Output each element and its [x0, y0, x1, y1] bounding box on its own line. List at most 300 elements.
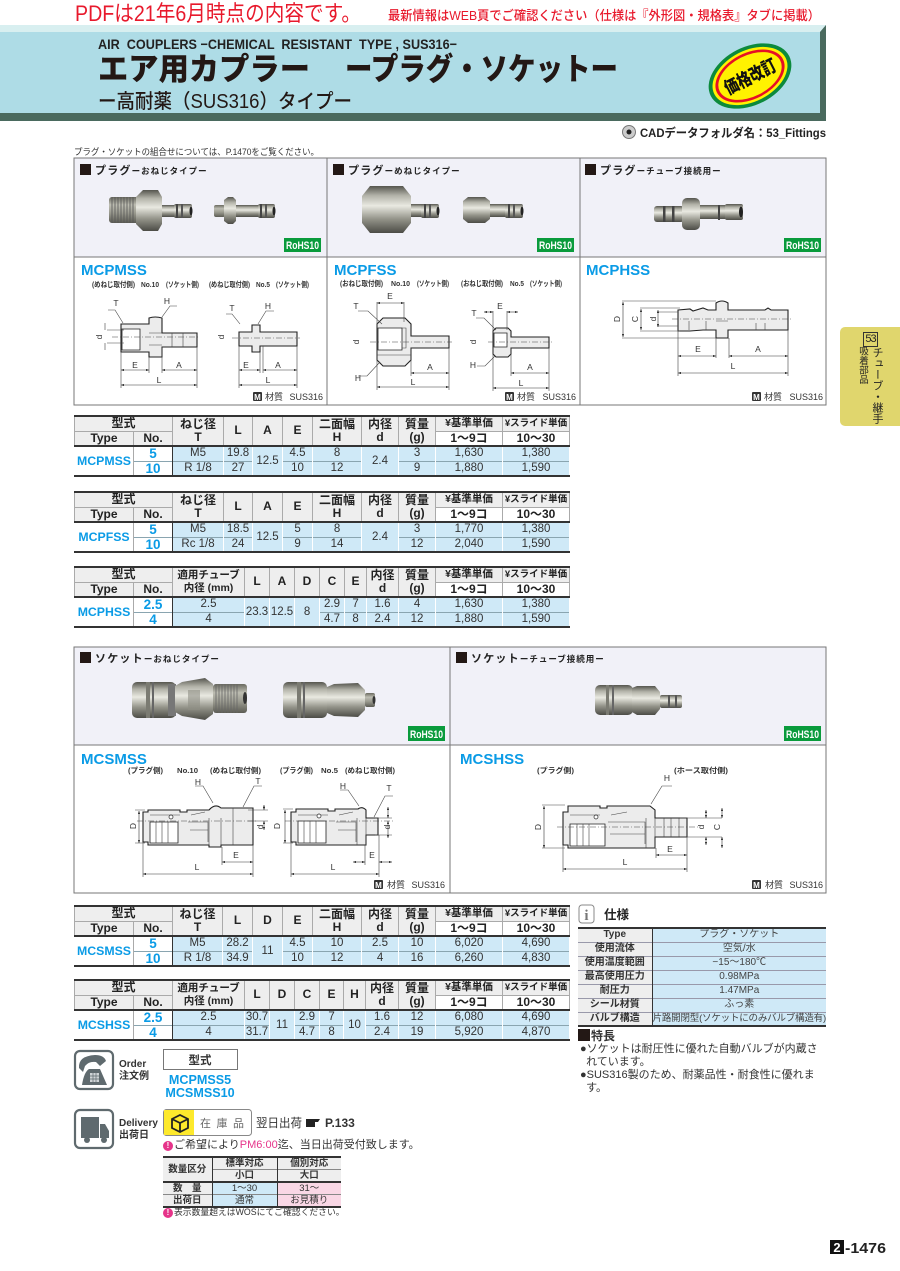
- spec table: 1.47MPa: [719, 985, 759, 996]
- table: MCPFSS: T: [194, 506, 202, 520]
- table: MCPFSS: 14: [331, 538, 343, 550]
- red notice: [75, 1, 820, 25]
- labels: MCPMSS: (ソケット側): [276, 279, 309, 289]
- delivery table: 大口: [300, 1170, 319, 1181]
- heading: tube plug: プラグーチューブ接続用ー: [600, 163, 722, 177]
- table: MCSHSS: L: [253, 987, 261, 1001]
- table: MCPHSS: D: [303, 574, 311, 588]
- table: MCPMSS: R 1/8: [184, 462, 212, 474]
- model name: MCSMSS: [81, 751, 147, 768]
- quantity note: !: [167, 1208, 169, 1217]
- material label: 材質: [517, 391, 535, 402]
- table: MCPFSS: ¥基準単価: [445, 493, 493, 505]
- table: MCSMSS: (g): [409, 920, 425, 934]
- table: MCPMSS: 9: [414, 462, 420, 474]
- table: MCSHSS: 4.7: [299, 1026, 315, 1038]
- table: MCPFSS: 内径: [368, 492, 392, 506]
- features list: ●SUS316製のため、耐薬品性・耐食性に優れま: [580, 1069, 815, 1081]
- table: MCSHSS: 内径 (mm): [184, 995, 233, 1007]
- table: MCPHSS: 2.5: [201, 598, 217, 610]
- spec heading: [578, 904, 630, 924]
- drawing: MCSMSS No.10: T: [255, 776, 261, 786]
- delivery table: 個別対応: [290, 1158, 328, 1169]
- table: MCPFSS: A: [263, 499, 272, 513]
- table: MCPFSS: E: [294, 499, 302, 513]
- spec table: 最高使用圧力: [585, 971, 645, 982]
- table: MCSMSS: 型式: [112, 906, 136, 920]
- table: MCSHSS: [74, 979, 570, 1041]
- table: MCPMSS: ¥スライド単価: [505, 418, 567, 429]
- table: MCSMSS: 10: [291, 952, 304, 964]
- labels: MCPFSS: No.5: [510, 279, 524, 288]
- table: MCSHSS: 4: [205, 1026, 212, 1038]
- drawing: MCPMSS No.5: d: [216, 334, 226, 339]
- order models: MCPMSS5: [169, 1073, 231, 1087]
- table: MCPMSS: A: [263, 423, 272, 437]
- table: MCPMSS: T: [194, 430, 202, 444]
- icon: phone: [75, 1051, 113, 1089]
- table: MCPMSS: E: [294, 423, 302, 437]
- table: MCSHSS: 31.7: [246, 1026, 268, 1038]
- tab number: 53: [865, 333, 876, 345]
- spec table: −15〜180℃: [712, 957, 766, 968]
- drawing: MCSMSS No.5: T: [386, 783, 392, 793]
- features: [578, 1029, 818, 1094]
- model name: MCPHSS: [586, 262, 650, 279]
- spec table: 使用温度範囲: [585, 957, 645, 968]
- table: MCPHSS: C: [328, 574, 336, 588]
- table: MCPHSS: (g): [409, 581, 425, 595]
- table: MCPHSS: 内径: [370, 568, 395, 582]
- drawing: MCSMSS No.10: H: [195, 777, 201, 787]
- drawing: MCSMSS No.5: [272, 781, 395, 877]
- labels: MCPFSS: (おねじ取付側): [340, 278, 383, 288]
- table: MCSHSS: ¥スライド単価: [505, 982, 567, 993]
- table: MCSMSS: MCSMSS: [77, 944, 131, 958]
- delivery table: 1〜30: [232, 1183, 257, 1194]
- labels: MCPFSS: (ソケット側): [530, 278, 562, 288]
- drawing: MCPFSS No.5: A: [527, 362, 533, 372]
- spec table: Type: [603, 929, 626, 940]
- table: MCSHSS: H: [350, 987, 359, 1001]
- table: MCSMSS: 10: [411, 937, 423, 949]
- table: MCSMSS: 二面幅: [319, 906, 355, 920]
- table: MCSMSS: 16: [411, 952, 423, 964]
- spec table: 耐圧力: [600, 985, 630, 996]
- table: MCPMSS: 12: [331, 462, 343, 474]
- table: MCSMSS: 12: [331, 952, 343, 964]
- drawing: MCSHSS: H: [664, 773, 670, 783]
- rohs badge: RoHS10: [539, 240, 572, 252]
- heading: female thread plug: プラグーめねじタイプー: [348, 163, 461, 177]
- table: MCSMSS: 4.5: [290, 937, 306, 949]
- drawing: MCPFSS No.5: H: [470, 360, 476, 370]
- table: MCPHSS: 質量: [405, 568, 429, 582]
- material label: M: [254, 393, 261, 402]
- delivery table: 標準対応: [225, 1158, 264, 1169]
- drawing: MCPMSS No.10: [94, 296, 200, 388]
- drawing: MCPFSS No.10: A: [427, 362, 433, 372]
- drawing: MCPMSS No.5: H: [265, 301, 271, 311]
- table: MCPMSS: ねじ径: [180, 416, 216, 430]
- drawing: MCPFSS No.10: L: [411, 377, 416, 387]
- features list: [580, 1042, 818, 1094]
- drawing: MCPFSS No.10: T: [353, 301, 359, 311]
- drawing: MCPMSS No.5: T: [229, 303, 235, 313]
- table: MCPMSS: 二面幅: [319, 416, 355, 430]
- japanese subtitle: ー高耐薬（SUS316）タイプー: [98, 90, 352, 113]
- table: MCSHSS: 質量: [405, 980, 429, 994]
- table: MCPHSS: 23.3: [246, 606, 268, 618]
- material label: M: [375, 881, 382, 890]
- drawing: MCPHSS: [612, 301, 793, 376]
- table: MCPHSS: 4: [205, 613, 212, 625]
- table: MCPHSS: [74, 566, 570, 628]
- drawing: MCSMSS No.5: D: [272, 823, 282, 829]
- same-day shipping note: !: [167, 1141, 169, 1150]
- drawing: MCSMSS No.10: d: [255, 824, 265, 829]
- labels: MCSMSS: No.10: [177, 766, 198, 775]
- drawing: MCPHSS: A: [755, 344, 761, 354]
- drawing: MCSHSS: [533, 773, 722, 872]
- table: MCPMSS: (g): [409, 430, 425, 444]
- page number: [830, 1240, 886, 1256]
- heading: male thread plug: プラグーおねじタイプー: [95, 163, 208, 177]
- table: MCPHSS: 4: [149, 612, 157, 627]
- table: MCPHSS: 2.9: [324, 598, 340, 610]
- labels: MCSMSS: (プラグ側): [128, 765, 163, 775]
- quantity note: 表示数量超えはWOSにてご確認ください。: [174, 1207, 345, 1217]
- delivery text: 出荷日: [119, 1128, 149, 1141]
- drawing: MCSMSS No.5: L: [331, 862, 336, 872]
- table: MCPFSS: 1,380: [522, 523, 550, 535]
- table: MCSMSS: ¥スライド単価: [505, 908, 567, 919]
- stock box: [164, 1110, 252, 1136]
- table: MCPHSS: MCPHSS: [78, 604, 130, 618]
- table: MCPMSS: 12.5: [256, 454, 279, 466]
- red notice: 最新情報はWEB頁でご確認ください（仕様は『外形図・規格表』タブに掲載）: [388, 8, 820, 23]
- table: MCPFSS: [74, 491, 570, 553]
- table: MCSMSS: 内径: [368, 906, 392, 920]
- table: MCSHSS: 2.9: [299, 1011, 315, 1023]
- delivery table: 出荷日: [173, 1195, 202, 1206]
- table: MCPHSS: ¥スライド単価: [505, 569, 567, 580]
- table: MCPFSS: 型式: [112, 492, 136, 506]
- drawing: MCSMSS No.5: H: [340, 781, 346, 791]
- panel: plugs: [74, 158, 826, 406]
- table: MCPMSS: MCPMSS: [77, 454, 131, 468]
- table: MCPMSS: 1,880: [455, 462, 483, 474]
- table: MCSHSS: 12: [411, 1011, 423, 1023]
- table: MCPHSS: 8: [352, 613, 359, 625]
- table: MCPHSS: 1,880: [455, 613, 483, 625]
- labels: MCPFSS: (おねじ取付側): [461, 278, 503, 288]
- table: MCPFSS: d: [376, 506, 384, 520]
- table: MCPFSS: 8: [334, 523, 340, 535]
- delivery text: Delivery: [119, 1118, 158, 1129]
- table: MCPHSS: 2.4: [375, 613, 391, 625]
- rohs badge: [408, 726, 445, 741]
- table: MCSHSS: 2.5: [144, 1010, 162, 1025]
- material label: [374, 879, 445, 890]
- table: MCPMSS: 10: [291, 462, 304, 474]
- table: MCPHSS: 適用チューブ: [177, 568, 240, 580]
- spec table: プラグ・ソケット: [699, 929, 779, 940]
- model name: MCSHSS: [460, 751, 524, 768]
- table: MCPFSS: 2,040: [455, 538, 483, 550]
- table: MCSHSS: 8: [328, 1026, 335, 1038]
- labels: MCSHSS: (プラグ側): [537, 765, 575, 775]
- table: MCPHSS: 7: [352, 598, 359, 610]
- table: MCPFSS: 10: [145, 537, 161, 552]
- rohs badge: RoHS10: [786, 240, 819, 252]
- table: MCSMSS: R 1/8: [184, 952, 211, 964]
- spec table: シール材質: [590, 999, 640, 1010]
- table: MCPMSS: H: [333, 430, 341, 444]
- labels: MCPMSS: No.5: [256, 280, 270, 289]
- icon: truck: [75, 1110, 113, 1148]
- labels: MCSMSS: [128, 765, 395, 775]
- table: MCPMSS: d: [376, 430, 384, 444]
- table: MCSHSS: 2.5: [201, 1011, 217, 1023]
- drawing: MCPFSS No.5: d: [468, 339, 478, 344]
- tab sub category: 吸着部品: [857, 346, 868, 384]
- table: MCSHSS: 4: [149, 1025, 157, 1040]
- table: MCSHSS: 1.6: [374, 1011, 390, 1023]
- table: MCPFSS: 3: [414, 523, 420, 535]
- spec table: [578, 927, 826, 1027]
- tab number: [863, 332, 878, 347]
- table: MCPFSS: 二面幅: [319, 492, 355, 506]
- delivery table: お見積り: [290, 1195, 328, 1206]
- material label: SUS316: [542, 392, 576, 402]
- table: MCPFSS: 1,590: [522, 538, 550, 550]
- rohs badge: [537, 238, 574, 252]
- table: MCPMSS: L: [234, 423, 242, 437]
- table: MCSMSS: M5: [190, 937, 206, 949]
- heading: male thread socket: ソケットーおねじタイプー: [95, 652, 220, 665]
- table: MCSMSS: 34.9: [226, 952, 249, 964]
- table: MCPHSS: 1,590: [522, 613, 550, 625]
- spec table: 空気/水: [723, 943, 756, 954]
- drawing: MCPHSS: D: [612, 316, 622, 322]
- main title: エア用カプラー: [98, 52, 310, 87]
- table: MCSHSS: 11: [276, 1018, 288, 1030]
- column label: [164, 1050, 238, 1070]
- table: MCSMSS: ¥基準単価: [445, 907, 493, 919]
- table: MCPMSS: 5: [149, 446, 157, 461]
- table: MCPFSS: MCPFSS: [78, 530, 130, 544]
- table: MCSHSS: 6,080: [455, 1011, 483, 1023]
- drawing: MCPFSS No.10: d: [351, 339, 361, 344]
- table: MCSMSS: D: [263, 913, 272, 927]
- model name: MCPFSS: [334, 262, 397, 279]
- photo: MCSMSS sockets: [132, 678, 376, 720]
- features heading: 特長: [591, 1029, 615, 1043]
- table: MCPMSS: 4.5: [290, 447, 306, 459]
- table: MCSMSS: 6,260: [455, 952, 483, 964]
- spec table: 片路開閉型(ソケットにのみバルブ構造有): [653, 1013, 826, 1024]
- rohs badge: RoHS10: [786, 729, 819, 741]
- next day shipping: P.133: [325, 1116, 355, 1130]
- table: MCSHSS: 10: [348, 1018, 361, 1030]
- table: MCSMSS: 28.2: [226, 937, 249, 949]
- features list: す。: [586, 1082, 607, 1094]
- material label: SUS316: [411, 880, 445, 890]
- table: MCPHSS: 内径 (mm): [184, 582, 233, 594]
- labels: MCPFSS: (ソケット側): [417, 278, 449, 288]
- photo: MCSHSS socket: [595, 685, 682, 715]
- labels: MCPMSS: (めねじ取付側): [92, 279, 135, 289]
- spec heading: 仕様: [604, 907, 630, 922]
- table: MCPMSS: M5: [190, 447, 206, 459]
- drawing: MCSHSS: D: [533, 824, 543, 830]
- table: MCSMSS: T: [194, 920, 201, 934]
- table: MCPFSS: ¥スライド単価: [505, 494, 567, 505]
- labels: MCSMSS: (プラグ側): [280, 765, 313, 775]
- table: MCPHSS: 12.5: [271, 606, 293, 618]
- table: MCPHSS: 12: [411, 613, 423, 625]
- features list: れています。: [586, 1056, 651, 1068]
- spec heading: i: [584, 908, 589, 924]
- table: MCSHSS: C: [303, 987, 311, 1001]
- material label: [253, 391, 323, 402]
- drawing: MCSMSS No.10: L: [195, 862, 200, 872]
- badge: price revised: [698, 30, 802, 122]
- material label: SUS316: [289, 392, 323, 402]
- table: MCPHSS: A: [278, 574, 286, 588]
- table: MCPHSS: 4: [414, 598, 420, 610]
- table: MCPMSS: 8: [334, 447, 340, 459]
- drawing: MCPMSS No.10: d: [94, 334, 104, 339]
- labels: MCPMSS: (ソケット側): [166, 279, 199, 289]
- drawing: MCSHSS: C: [712, 824, 722, 830]
- table: MCPFSS: 2.4: [372, 530, 388, 542]
- table: MCSHSS: 適用チューブ: [177, 982, 240, 994]
- labels: MCSMSS: (めねじ取付側): [210, 765, 262, 775]
- drawing: MCPMSS No.10: H: [164, 296, 170, 306]
- material label: [505, 391, 576, 402]
- spec table: ふっ素: [724, 999, 754, 1010]
- table: MCPMSS: 3: [414, 447, 420, 459]
- labels: MCPMSS: (めねじ取付側): [209, 279, 250, 289]
- labels: MCPMSS: [92, 279, 309, 289]
- material label: SUS316: [789, 880, 823, 890]
- drawing: MCPMSS No.10: A: [176, 360, 182, 370]
- table: MCSMSS: 10: [331, 937, 343, 949]
- material label: 材質: [765, 879, 783, 890]
- drawing: MCSMSS No.10: D: [128, 823, 138, 829]
- table: MCPHSS: L: [253, 574, 261, 588]
- table: MCSHSS: (g): [409, 994, 425, 1008]
- table: MCPHSS: ¥基準単価: [445, 568, 493, 580]
- photo: MCPMSS plugs: [109, 190, 276, 231]
- table: MCSHSS: d: [378, 994, 386, 1008]
- table: MCPHSS: 1,380: [522, 598, 550, 610]
- drawing: MCPHSS: C: [630, 316, 640, 322]
- drawing: MCSMSS No.5: E: [369, 850, 375, 860]
- rohs badge: RoHS10: [410, 729, 443, 741]
- table: MCPMSS: 1,590: [522, 462, 550, 474]
- main title: [98, 52, 618, 87]
- title banner: [0, 25, 826, 121]
- table: MCPFSS: 5: [294, 523, 301, 535]
- heading: tube socket: ソケットーチューブ接続用ー: [471, 652, 605, 665]
- table: MCSMSS: 4: [377, 952, 383, 964]
- table: MCPHSS: E: [352, 574, 360, 588]
- table: MCPMSS: [74, 415, 570, 477]
- table: MCSHSS: 2.4: [374, 1026, 390, 1038]
- table: MCPMSS: 27: [232, 462, 244, 474]
- table: MCPHSS: d: [379, 581, 386, 595]
- delivery: [74, 1108, 355, 1150]
- drawing: MCPFSS No.10: [351, 291, 452, 390]
- table: MCSMSS: 5: [149, 936, 157, 951]
- material label: M: [506, 393, 513, 402]
- table: MCPFSS: 12.5: [256, 530, 279, 542]
- labels: MCPFSS: No.10: [391, 279, 410, 288]
- table: MCPFSS: ねじ径: [180, 492, 216, 506]
- order text: Order: [119, 1059, 146, 1070]
- table: MCSMSS: ねじ径: [180, 906, 216, 920]
- rohs badge: [284, 238, 321, 252]
- material label: [752, 879, 823, 890]
- drawing: MCPMSS No.5: A: [275, 360, 281, 370]
- labels: MCPFSS: [340, 278, 562, 288]
- table: MCSHSS: MCSHSS: [78, 1018, 130, 1032]
- table: MCPMSS: 2.4: [372, 454, 388, 466]
- table: MCSHSS: 5,920: [455, 1026, 483, 1038]
- table: MCSMSS: 10: [145, 951, 161, 966]
- material label: 材質: [764, 391, 782, 402]
- drawing: MCPHSS: d: [648, 316, 658, 321]
- material label: 材質: [387, 879, 405, 890]
- order models: [165, 1073, 235, 1100]
- table: MCPMSS: ¥基準単価: [445, 417, 493, 429]
- table: MCPMSS: 内径: [368, 416, 392, 430]
- delivery text: [119, 1118, 158, 1141]
- table: MCSHSS: D: [278, 987, 286, 1001]
- table: MCPMSS: 19.8: [227, 447, 249, 459]
- features list: ●ソケットは耐圧性に優れた自動バルブが内蔵さ: [580, 1043, 818, 1055]
- table: MCSMSS: d: [376, 920, 384, 934]
- table: MCSHSS: 30.7: [246, 1011, 268, 1023]
- drawing: MCSHSS: d: [696, 824, 706, 829]
- next day shipping: 翌日出荷: [256, 1116, 302, 1130]
- table: MCPMSS: 1,630: [455, 447, 483, 459]
- table: MCPFSS: H: [333, 506, 341, 520]
- material label: SUS316: [789, 392, 823, 402]
- drawing: MCPFSS No.10: E: [387, 291, 393, 301]
- delivery table: [163, 1156, 341, 1208]
- labels: MCSHSS: (ホース取付側): [674, 765, 729, 775]
- badge: price revised: 価格改訂: [721, 54, 780, 99]
- material label: M: [753, 881, 760, 890]
- drawing: MCPMSS No.10: L: [157, 375, 162, 385]
- drawing: MCPFSS No.5: E: [497, 301, 503, 311]
- table: MCSHSS: ¥基準単価: [445, 981, 493, 993]
- labels: MCPMSS: No.10: [141, 280, 159, 289]
- table: MCSMSS: [74, 905, 570, 967]
- material label: 材質: [265, 391, 283, 402]
- table: MCPHSS: 型式: [112, 567, 136, 581]
- photo: MCPHSS plug: [654, 198, 743, 230]
- material label: [752, 391, 823, 402]
- delivery table: 数 量: [173, 1183, 202, 1194]
- table: MCPHSS: 8: [304, 606, 310, 618]
- table: MCPFSS: 質量: [405, 492, 429, 506]
- table: MCSMSS: 4,690: [522, 937, 550, 949]
